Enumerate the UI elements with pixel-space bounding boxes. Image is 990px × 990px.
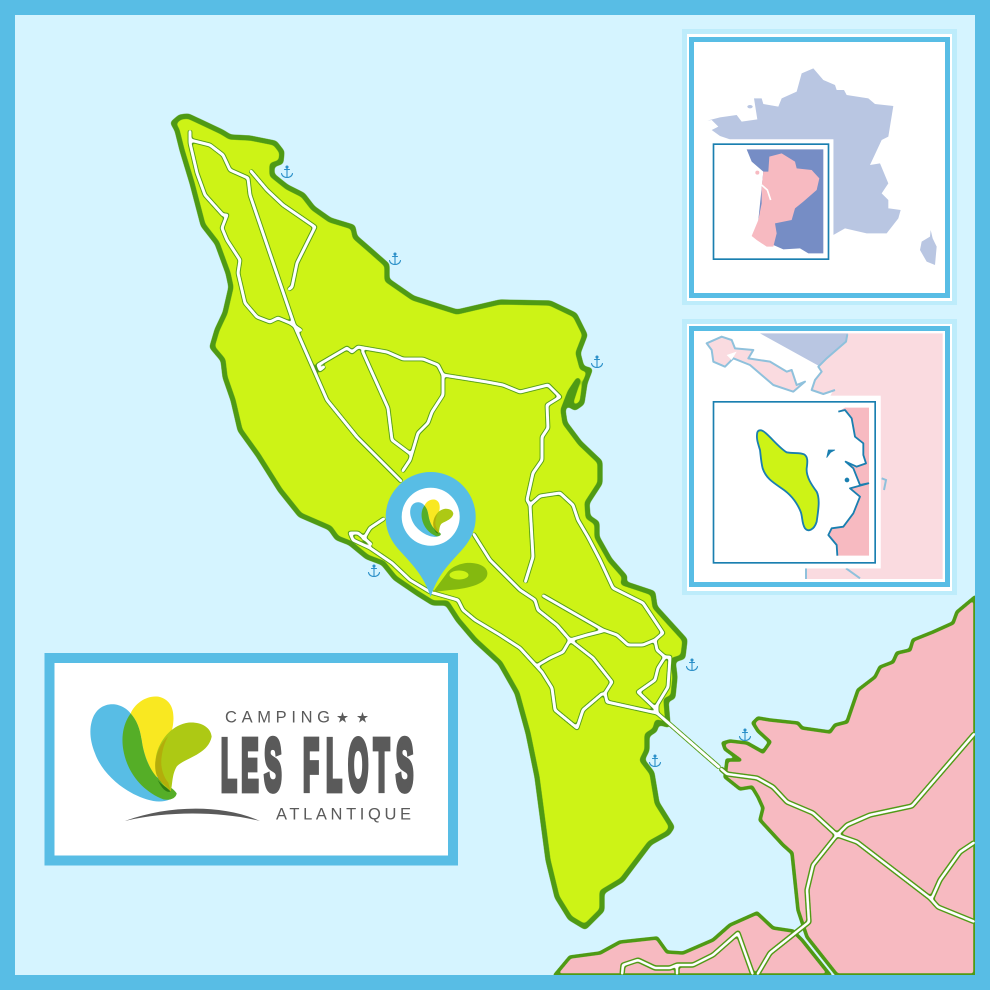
logo text: atlantique: ATLANTIQUE bbox=[276, 806, 411, 824]
icon: anchor bbox=[282, 166, 292, 178]
anchors bbox=[282, 166, 750, 766]
icon: location pin bbox=[386, 472, 487, 597]
icon: anchor bbox=[390, 253, 400, 264]
detail inset box bbox=[711, 396, 881, 568]
logo text: camping: CAMPING bbox=[225, 708, 330, 726]
icon: anchor bbox=[592, 356, 602, 368]
mainland roads bbox=[622, 733, 975, 975]
pin logo bbox=[410, 499, 453, 537]
mainland: north-east coast bbox=[555, 597, 975, 975]
icon: anchor bbox=[740, 729, 750, 740]
island roads bbox=[190, 130, 720, 768]
island: Oléron bbox=[173, 116, 720, 927]
logo panel bbox=[50, 658, 453, 860]
inset panel: France bbox=[682, 29, 957, 305]
icon: anchor bbox=[650, 755, 660, 766]
icon: anchor bbox=[368, 565, 380, 576]
logo: swoosh bbox=[125, 809, 260, 821]
logo: stars: ★★ bbox=[336, 710, 376, 726]
inset panel: Charente coast bbox=[682, 319, 957, 595]
logo text: les flots: LES FLOTS bbox=[221, 726, 413, 806]
region inset bbox=[710, 139, 833, 263]
mini island bbox=[757, 430, 819, 530]
mainland: south shore bbox=[555, 913, 830, 975]
map: France bbox=[707, 68, 937, 265]
map: coast detail bbox=[707, 333, 943, 579]
map: Île de Ré bbox=[707, 337, 805, 392]
icon: anchor bbox=[686, 659, 698, 670]
logo: petals bbox=[90, 696, 212, 801]
